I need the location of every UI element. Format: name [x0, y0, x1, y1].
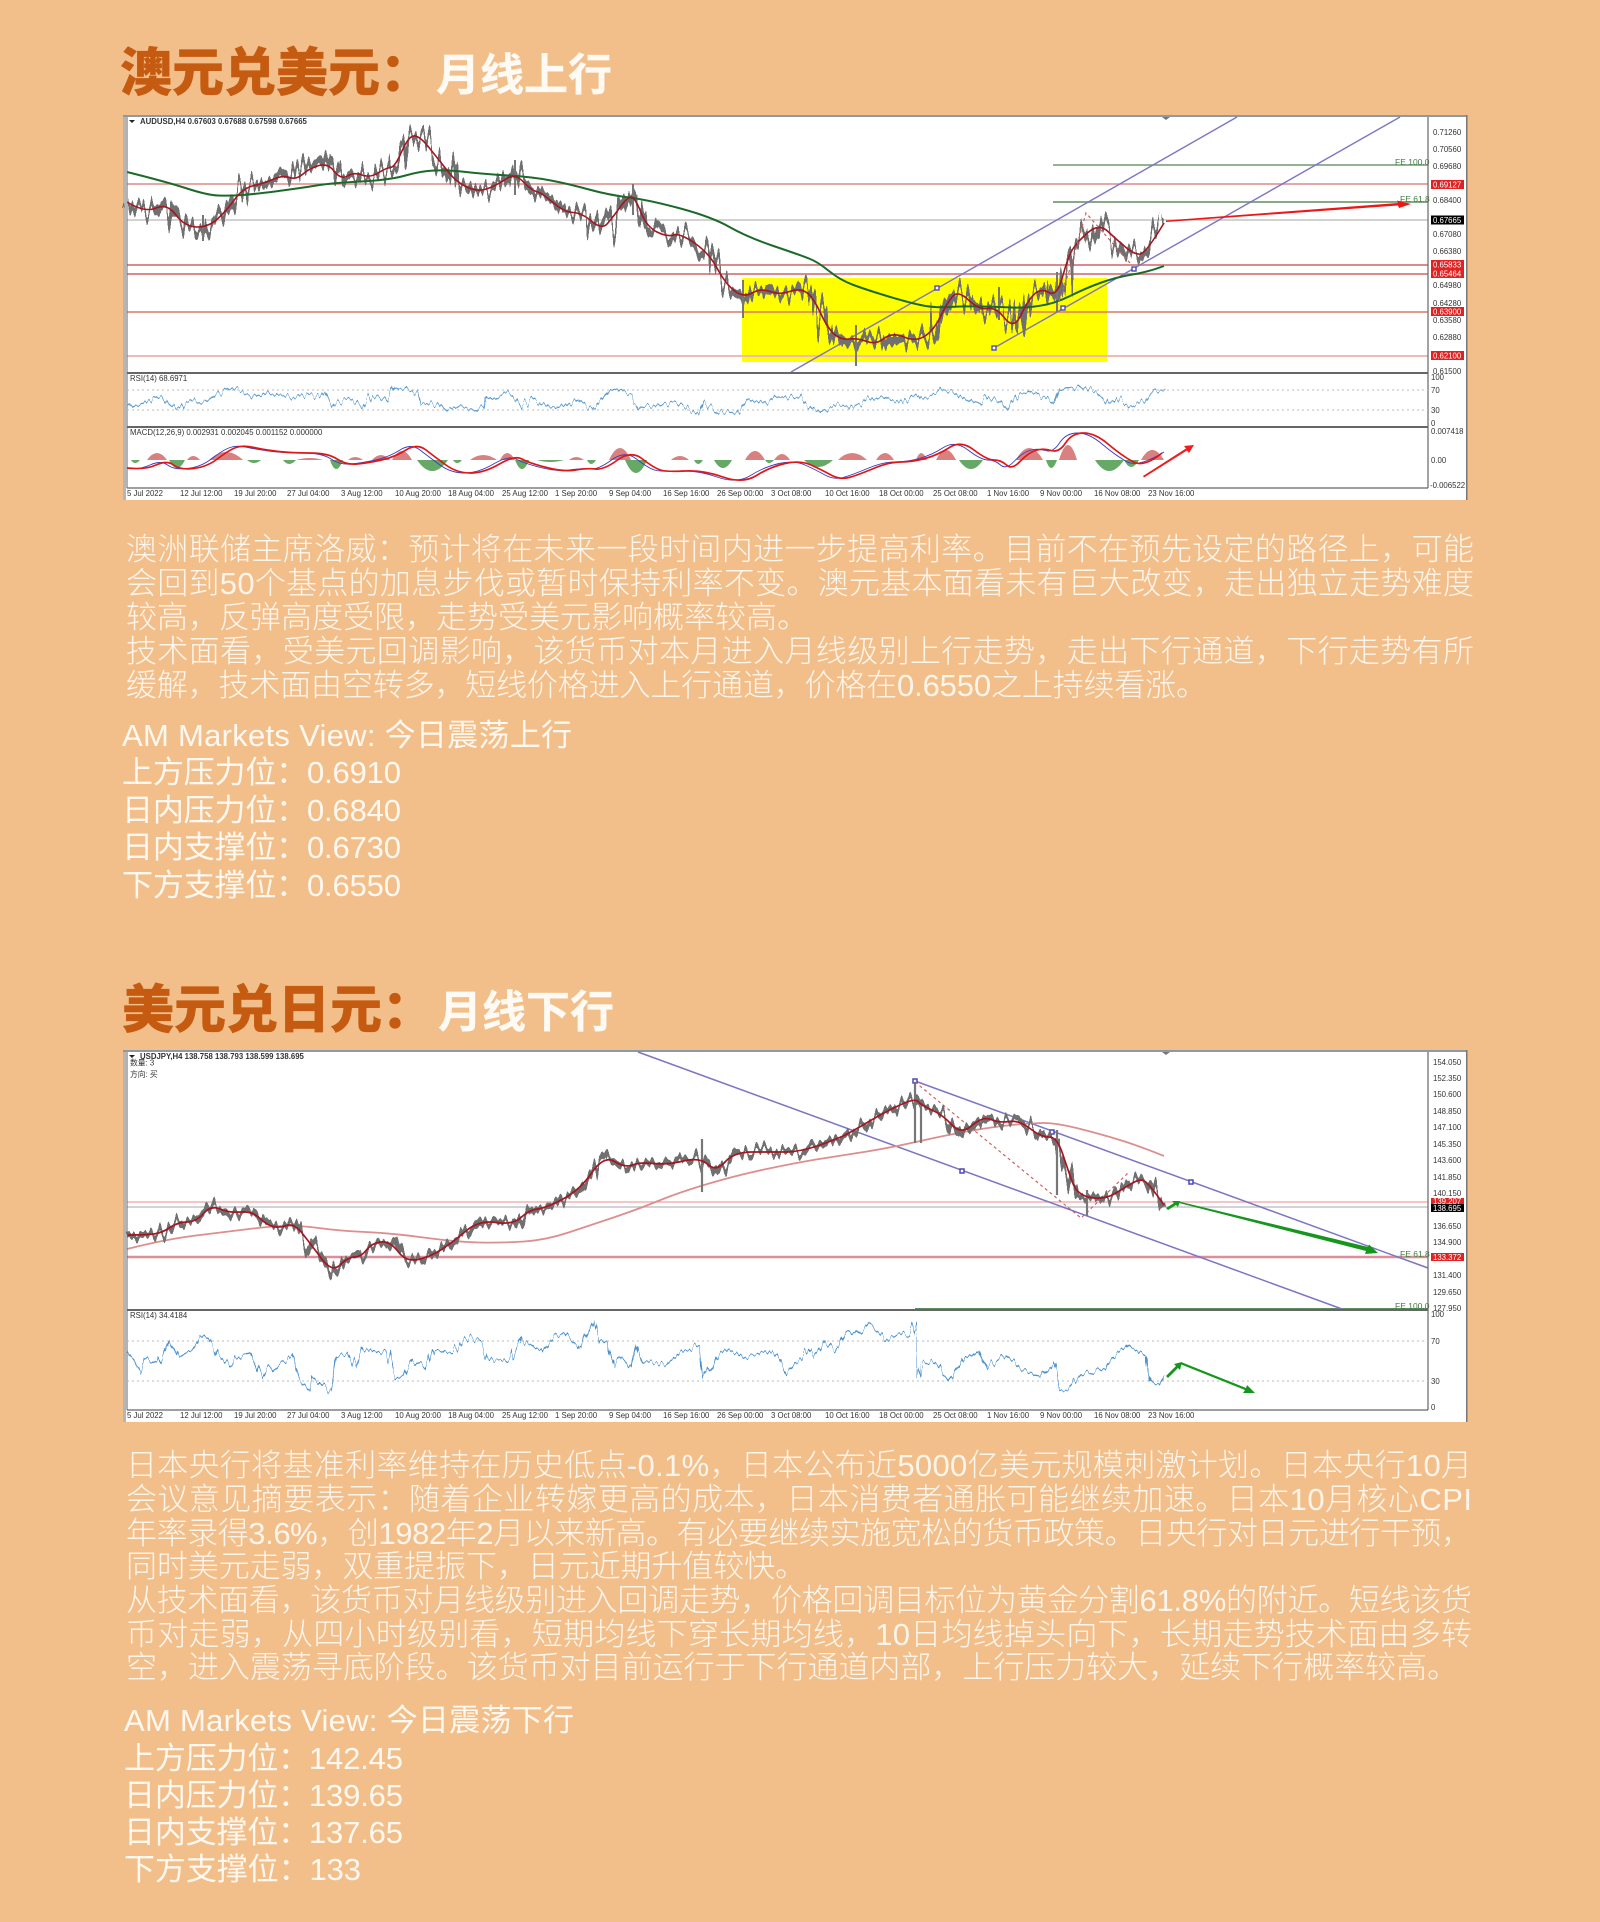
MACD panel: MACD(12,26,9) 0.002931 0.002045 0.001152 0.000000: [130, 428, 323, 437]
RSI panel: [127, 373, 1445, 428]
channel lines: [791, 117, 1400, 372]
RSI panel: 70: [1431, 386, 1440, 395]
chart: AUDUSD H4: [123, 115, 1468, 500]
title: AUD/USD: 澳元兑美元：: [120, 45, 432, 103]
date axis: 23 Nov 16:00: [1148, 489, 1195, 498]
title: AUD/USD: 月线上行: [436, 51, 612, 100]
date axis: 26 Sep 00:00: [717, 489, 764, 498]
RSI panel: 100: [1431, 1310, 1445, 1319]
date axis: 26 Sep 00:00: [717, 1411, 764, 1420]
date axis: 9 Nov 00:00: [1040, 489, 1083, 498]
candles: [127, 135, 1164, 345]
price axis: 0.68400: [1433, 196, 1462, 205]
text block: JPY analysis: 年率录得3.6%，创1982年2月以来新高。有必要继续实施宽松的货币政策。日央行对日元进行干预，: [126, 1516, 1472, 1551]
text block: AUD analysis: 缓解，技术面由空转多，短线价格进入上行通道，价格在0.6550之上持续看涨。: [126, 668, 1207, 703]
arrow: green down target: [1179, 1202, 1378, 1254]
text block: AUD key levels: 下方支撑位：0.6550: [122, 868, 401, 903]
chart header: 方向: 买: [130, 1069, 158, 1079]
date axis: 18 Oct 00:00: [879, 489, 924, 498]
date axis: 1 Sep 20:00: [555, 489, 598, 498]
text block: JPY analysis: 空，进入震荡寻底阶段。该货币对目前运行于下行通道内部，上行压力较大，延续下行概率较高。: [126, 1650, 1458, 1685]
date axis: 1 Nov 16:00: [987, 1411, 1030, 1420]
price axis: 0.65833: [1433, 260, 1461, 270]
date axis: 1 Sep 20:00: [555, 1411, 598, 1420]
MACD panel: 0.00: [1431, 456, 1447, 465]
price axis: 136.650: [1433, 1222, 1462, 1231]
price axis: 152.350: [1433, 1074, 1462, 1083]
text block: AUD analysis: 澳洲联储主席洛威：预计将在未来一段时间内进一步提高利率。目前不在预先设定的路径上，可能: [126, 532, 1474, 567]
chart header: [129, 1052, 1170, 1079]
RSI panel: 30: [1431, 1377, 1440, 1386]
price axis: 145.350: [1433, 1140, 1462, 1149]
price axis: 154.050: [1433, 1058, 1462, 1067]
fibonacci labels: FE 61.8: [1400, 1249, 1430, 1259]
date axis: 10 Aug 20:00: [395, 489, 442, 498]
price axis: 0.63900: [1433, 308, 1462, 316]
date axis: 16 Nov 08:00: [1094, 489, 1141, 498]
price spikes: [203, 160, 1057, 366]
chart: USDJPY H4: [123, 1050, 1468, 1422]
date axis: 18 Aug 04:00: [448, 1411, 495, 1420]
date axis: 10 Aug 20:00: [395, 1411, 442, 1420]
RSI panel: 0: [1431, 419, 1436, 428]
dashed zigzag: [915, 1082, 1128, 1218]
text block: AUD analysis: 技术面看，受美元回调影响，该货币对本月进入月线级别上行走势，走出下行通道，下行走势有所: [126, 634, 1474, 669]
price axis: 0.69680: [1433, 162, 1462, 171]
MACD panel: [127, 427, 1465, 490]
date axis: [127, 1411, 1195, 1420]
price axis: 0.64280: [1433, 299, 1462, 308]
fibonacci labels: FE 100.0: [1395, 157, 1430, 167]
fibonacci labels: [1395, 1249, 1430, 1311]
price axis: 127.950: [1433, 1304, 1462, 1313]
text block: AUD analysis: 较高，反弹高度受限，走势受美元影响概率较高。: [126, 600, 808, 635]
price axis: 129.650: [1433, 1288, 1462, 1297]
moving average: short red: [127, 136, 1164, 343]
date axis: 18 Aug 04:00: [448, 489, 495, 498]
arrow: RSI falling: [1180, 1362, 1255, 1393]
candles: [127, 1098, 1164, 1273]
price axis: 134.900: [1433, 1238, 1462, 1247]
price axis: 139.207: [1433, 1197, 1461, 1206]
date axis: 3 Aug 12:00: [341, 1411, 383, 1420]
date axis: 12 Jul 12:00: [180, 1411, 223, 1420]
price axis: 0.62880: [1433, 333, 1462, 342]
price axis: 141.850: [1433, 1173, 1462, 1182]
price axis: 0.65464: [1433, 270, 1462, 278]
price axis: 140.150: [1433, 1189, 1462, 1198]
RSI panel: RSI(14) 34.4184: [130, 1311, 188, 1320]
text block: AUD key levels: AM Markets View: 今日震荡上行: [122, 718, 572, 753]
date axis: 18 Oct 00:00: [879, 1411, 924, 1420]
text block: JPY analysis: 同时美元走弱，双重提振下，日元近期升值较快。: [126, 1549, 806, 1584]
title: USD/JPY: 美元兑日元：: [122, 982, 434, 1040]
fibonacci labels: FE 61.8: [1400, 194, 1430, 204]
horizontal levels: [127, 1202, 1428, 1309]
date axis: 1 Nov 16:00: [987, 489, 1030, 498]
date axis: 25 Oct 08:00: [933, 1411, 978, 1420]
text block: JPY analysis: 从技术面看，该货币对月线级别进入回调走势，价格回调目标位为黄金分割61.8%的附近。短线该货: [126, 1583, 1472, 1618]
highlight: yellow consolidation zone: [742, 278, 1107, 362]
channel lines: [638, 1052, 1428, 1309]
price axis: 147.100: [1433, 1123, 1462, 1132]
fibonacci labels: FE 100.0: [1395, 1301, 1430, 1311]
date axis: 16 Sep 16:00: [663, 489, 710, 498]
date axis: 25 Aug 12:00: [502, 489, 549, 498]
horizontal levels: [127, 165, 1428, 356]
date axis: 9 Sep 04:00: [609, 1411, 652, 1420]
date axis: 23 Nov 16:00: [1148, 1411, 1195, 1420]
title: USD/JPY: [122, 982, 614, 1040]
moving average: long green: [127, 170, 1164, 308]
price axis: 0.64980: [1433, 281, 1462, 290]
price axis: 138.695: [1433, 1204, 1462, 1213]
date axis: 5 Jul 2022: [127, 1411, 163, 1420]
date axis: 25 Aug 12:00: [502, 1411, 549, 1420]
text block: JPY key levels: [124, 1703, 574, 1887]
arrow: green rebound: [1166, 1201, 1180, 1210]
text block: JPY key levels: 下方支撑位：133: [124, 1852, 361, 1887]
price axis: 0.67665: [1433, 216, 1462, 225]
RSI panel: RSI(14) 68.6971: [130, 374, 187, 383]
chart header: [129, 117, 1170, 126]
chart header: USDJPY,H4 138.758 138.793 138.599 138.695: [140, 1052, 305, 1061]
date axis: 9 Sep 04:00: [609, 489, 652, 498]
price axis: [1431, 1058, 1464, 1313]
date axis: 27 Jul 04:00: [287, 489, 330, 498]
date axis: 16 Nov 08:00: [1094, 1411, 1141, 1420]
RSI panel: 0: [1431, 1403, 1436, 1412]
price axis: 131.400: [1433, 1271, 1462, 1280]
text block: AUD key levels: 日内支撑位：0.6730: [122, 830, 401, 865]
price axis: 0.62100: [1433, 352, 1462, 360]
date axis: 9 Nov 00:00: [1040, 1411, 1083, 1420]
date axis: [127, 489, 1195, 498]
text block: AUD analysis: 会回到50个基点的加息步伐或暂时保持利率不变。澳元基本面看未有巨大改变，走出独立走势难度: [126, 566, 1474, 601]
price axis: [1431, 128, 1464, 376]
date axis: 27 Jul 04:00: [287, 1411, 330, 1420]
arrow: RSI rebound: [1166, 1362, 1182, 1378]
text block: JPY analysis: [126, 1448, 1472, 1685]
RSI panel: [127, 1310, 1445, 1412]
date axis: 10 Oct 16:00: [825, 1411, 870, 1420]
moving average: short red: [127, 1100, 1164, 1268]
price axis: 0.69127: [1433, 180, 1461, 190]
text block: JPY key levels: 上方压力位：142.45: [124, 1741, 403, 1776]
price axis: 0.70560: [1433, 145, 1462, 154]
chart header: AUDUSD,H4 0.67603 0.67688 0.67598 0.67665: [140, 117, 308, 126]
RSI panel: 30: [1431, 406, 1440, 415]
RSI panel: 70: [1431, 1337, 1440, 1346]
RSI panel: 100: [1431, 373, 1445, 382]
chart header: 数量: 3: [130, 1058, 154, 1068]
text block: AUD key levels: 上方压力位：0.6910: [122, 755, 401, 790]
fibonacci labels: [1395, 157, 1430, 204]
date axis: 12 Jul 12:00: [180, 489, 223, 498]
date axis: 10 Oct 16:00: [825, 489, 870, 498]
price axis: 133.372: [1433, 1253, 1461, 1262]
text block: JPY key levels: 日内压力位：139.65: [124, 1778, 403, 1813]
price spikes: [702, 1082, 1087, 1216]
date axis: 3 Oct 08:00: [771, 1411, 812, 1420]
panel frames: [127, 117, 1428, 488]
text block: JPY analysis: 会议意见摘要表示：随着企业转嫁更高的成本，日本消费者通胀可能继续加速。日本10月核心CPI: [126, 1482, 1472, 1517]
price axis: 150.600: [1433, 1090, 1462, 1099]
price axis: 0.67080: [1433, 230, 1462, 239]
date axis: 19 Jul 20:00: [234, 489, 277, 498]
text block: JPY analysis: 币对走弱，从四小时级别看，短期均线下穿长期均线，10日均线掉头向下，长期走势技术面由多转: [126, 1617, 1472, 1652]
price axis: 0.61500: [1433, 367, 1462, 376]
text block: JPY analysis: 日本央行将基准利率维持在历史低点-0.1%，日本公布近5000亿美元规模刺激计划。日本央行10月: [126, 1448, 1472, 1483]
price axis: 0.71260: [1433, 128, 1462, 137]
text block: JPY key levels: AM Markets View: 今日震荡下行: [124, 1703, 574, 1738]
panel frames: [127, 1052, 1428, 1410]
price axis: 0.63580: [1433, 316, 1462, 325]
price axis: 0.66380: [1433, 247, 1462, 256]
text block: JPY key levels: 日内支撑位：137.65: [124, 1815, 403, 1850]
date axis: 5 Jul 2022: [127, 489, 163, 498]
moving average: long pink: [127, 1123, 1164, 1249]
date axis: 16 Sep 16:00: [663, 1411, 710, 1420]
date axis: 3 Oct 08:00: [771, 489, 812, 498]
MACD panel: -0.006522: [1430, 481, 1465, 490]
date axis: 25 Oct 08:00: [933, 489, 978, 498]
MACD panel: 0.007418: [1431, 427, 1464, 436]
arrow: red up target: [1166, 200, 1411, 222]
date axis: 19 Jul 20:00: [234, 1411, 277, 1420]
title: USD/JPY: 月线下行: [438, 988, 614, 1037]
dashed zigzag: [1057, 213, 1130, 307]
text block: AUD key levels: [122, 718, 572, 903]
date axis: 3 Aug 12:00: [341, 489, 383, 498]
text block: AUD key levels: 日内压力位：0.6840: [122, 793, 401, 828]
price axis: 148.850: [1433, 1107, 1462, 1116]
text block: AUD analysis: [126, 532, 1474, 703]
price axis: 143.600: [1433, 1156, 1462, 1165]
arrow: MACD rising: [1143, 445, 1194, 478]
title: AUD/USD: [120, 45, 612, 103]
